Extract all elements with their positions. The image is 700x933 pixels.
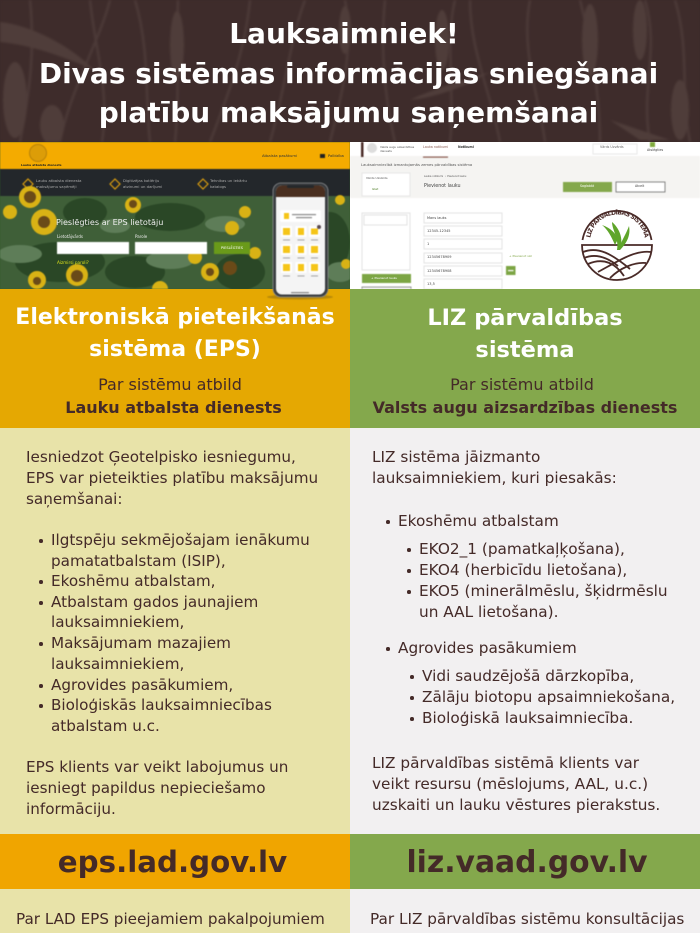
screenshot labels — [21, 153, 344, 265]
panel: LIZ body text: EKO4 (herbicīdu lietošana), — [419, 561, 627, 579]
panel: EPS heading: Par sistēmu atbild — [98, 375, 242, 394]
panel: EPS body text: informāciju. — [26, 800, 116, 818]
screenshot text: 12345678909 — [427, 255, 452, 259]
screenshot labels: Lauku atbalsta dienests — [21, 162, 62, 166]
panel: EPS body text: Atbalstam gados jaunajiem — [51, 593, 258, 611]
footer: EPS note: Par LAD EPS pieejamiem pakalpojumiem — [16, 910, 325, 928]
screenshot labels: Pieslēgties ar EPS lietotāju — [56, 216, 163, 226]
title: platību maksājumu saņemšanai — [99, 96, 598, 129]
screenshot labels: Tehnikas un iekārtu katalogs — [210, 178, 247, 188]
panel: EPS heading: Lauku atbalsta dienests — [65, 398, 282, 417]
screenshot labels: Lauku atbalsta dienesta maksājumu saņēmēji — [36, 178, 82, 188]
panel: LIZ body text: EKO2_1 (pamatkaļķošana), — [419, 540, 625, 558]
screenshot text: Valsts augu aizsardzības dienests — [380, 145, 414, 153]
panel: EPS body text: saņemšanai: — [26, 490, 122, 508]
panel: EPS body text: iesniegt papildus nepieciešamo — [26, 779, 266, 797]
panel: EPS heading: Elektroniskā pieteikšanās — [15, 305, 335, 330]
screenshot text: Pievienot lauku — [424, 184, 461, 189]
panel: LIZ body text: Zālāju biotopu apsaimniekošana, — [422, 688, 675, 706]
panel: EPS body text: lauksaimniekiem, — [51, 655, 184, 673]
screenshot text: 12345-12345 — [427, 229, 451, 233]
screenshot labels: Digitizējas kotlēriju atzinumi un darījumi — [123, 178, 162, 188]
panel: LIZ body text: uzskaiti un lauku vēstures pierakstus. — [372, 796, 660, 814]
url band: LIZ — [350, 834, 700, 889]
panel: EPS body text: lauksaimniekiem, — [51, 613, 184, 631]
screenshot text: Notikumi — [458, 144, 474, 148]
panel: EPS body text: atbalstam u.c. — [51, 717, 160, 735]
panel: LIZ body text: EKO5 (minerālmēslu, šķidrmēslu — [419, 582, 668, 600]
screenshot text: Saglabāt — [580, 184, 594, 188]
footer: LIZ note: Par LIZ pārvaldības sistēmu konsultācijas — [370, 910, 684, 928]
url band: LIZ: liz.vaad.gov.lv — [406, 844, 648, 880]
screenshot text: + Pievienot vēl — [509, 254, 532, 258]
url band: EPS: eps.lad.gov.lv — [58, 844, 287, 878]
panel: LIZ body text — [350, 428, 700, 834]
panel: LIZ heading: LIZ pārvaldības — [427, 305, 623, 331]
screenshot text: Lauka notikumi › Pievienot lauku — [424, 175, 466, 178]
panel: EPS body text: pamatatbalstam (ISIP), — [51, 552, 226, 570]
panel: EPS body text: Maksājumam mazajiem — [51, 634, 231, 652]
screenshot labels: Aizmirsi paroli? — [57, 260, 89, 264]
panel: EPS body text: Bioloģiskās lauksaimniecības — [51, 696, 272, 714]
panel: LIZ heading — [350, 289, 700, 428]
screenshot text — [361, 144, 663, 286]
panel: EPS body text: Ilgtspēju sekmējošajam ienākumu — [51, 531, 310, 549]
panel: LIZ body text: LIZ sistēma jāizmanto — [372, 448, 540, 466]
panel: EPS heading: sistēma (EPS) — [89, 337, 261, 362]
screenshot text: Mans lauks — [427, 216, 447, 220]
screenshot text: Iziet — [372, 187, 378, 191]
screenshot labels: PIESLĒGTIES — [221, 246, 243, 250]
screenshot labels: Parole — [135, 234, 147, 238]
panel: LIZ body text: Bioloģiskā lauksaimniecība. — [422, 709, 633, 727]
screenshot text: + Pievienot lauku — [371, 276, 397, 280]
panel: LIZ body text: veikt resursu (mēslojums, AAL, u.c.) — [372, 775, 648, 793]
screenshot: EPS login page — [0, 142, 350, 289]
panel: LIZ body text: Vidi saudzējošā dārzkopība, — [422, 667, 634, 685]
screenshot text: Vārds Uzvārds — [366, 176, 388, 180]
panel: EPS body text — [0, 428, 350, 834]
screenshot labels: Lietotājvārds — [57, 234, 83, 238]
panel: EPS body text: Ekoshēmu atbalstam, — [51, 572, 216, 590]
wheat background — [0, 0, 691, 142]
title: Divas sistēmas informācijas sniegšanai — [39, 57, 658, 90]
title — [39, 17, 658, 129]
screenshot text: Atslēgties — [647, 148, 663, 152]
panel: EPS heading — [0, 289, 350, 428]
panel: LIZ body text: Agrovides pasākumiem — [398, 639, 577, 657]
LIZ logo: LIZ PĀRVALDĪBAS SISTĒMA — [586, 209, 649, 238]
panel: EPS body text: EPS klients var veikt labojumus un — [26, 758, 288, 776]
screenshot text: Vārds Uzvārds — [600, 144, 624, 148]
screenshot text: Lauka notikumi — [423, 144, 448, 148]
panel: LIZ body text: Ekoshēmu atbalstam — [398, 512, 559, 530]
footer: EPS note — [0, 889, 350, 933]
panel: LIZ body text: lauksaimniekiem, kuri piesakās: — [372, 469, 617, 487]
screenshot text: Atcelt — [635, 184, 644, 188]
title: Lauksaimniek! — [229, 17, 459, 50]
panel: EPS body text: Iesniedzot Ģeotelpisko iesniegumu, — [26, 448, 296, 466]
header banner — [0, 0, 700, 142]
screenshot: LIZ management system — [350, 142, 700, 289]
screenshot text: 12345678908 — [427, 269, 452, 273]
panel: LIZ heading: Valsts augu aizsardzības dienests — [373, 398, 677, 417]
screenshot text: 1 — [427, 242, 429, 246]
screenshot text: 13,5 — [427, 282, 435, 286]
screenshot text: Lauksaimniecībā izmantojamās zemes pārvaldības sistēma — [361, 162, 472, 166]
screenshot labels: Palīdzība — [328, 154, 344, 158]
LIZ logo — [581, 209, 653, 281]
screenshot labels: Atbalsta pasākumi — [262, 153, 297, 158]
footer: LIZ note — [350, 889, 700, 933]
phone mockup — [267, 182, 333, 300]
panel: EPS body text: Agrovides pasākumiem, — [51, 676, 233, 694]
panel: LIZ heading: sistēma — [475, 337, 575, 363]
panel: LIZ heading: Par sistēmu atbild — [450, 375, 594, 394]
panel: LIZ body text: un AAL lietošana). — [419, 603, 559, 621]
panel: EPS body text: EPS var pieteikties platību maksājumu — [26, 469, 318, 487]
url band: EPS — [0, 834, 350, 889]
panel: LIZ body text: LIZ pārvaldības sistēmā klients var — [372, 754, 639, 772]
